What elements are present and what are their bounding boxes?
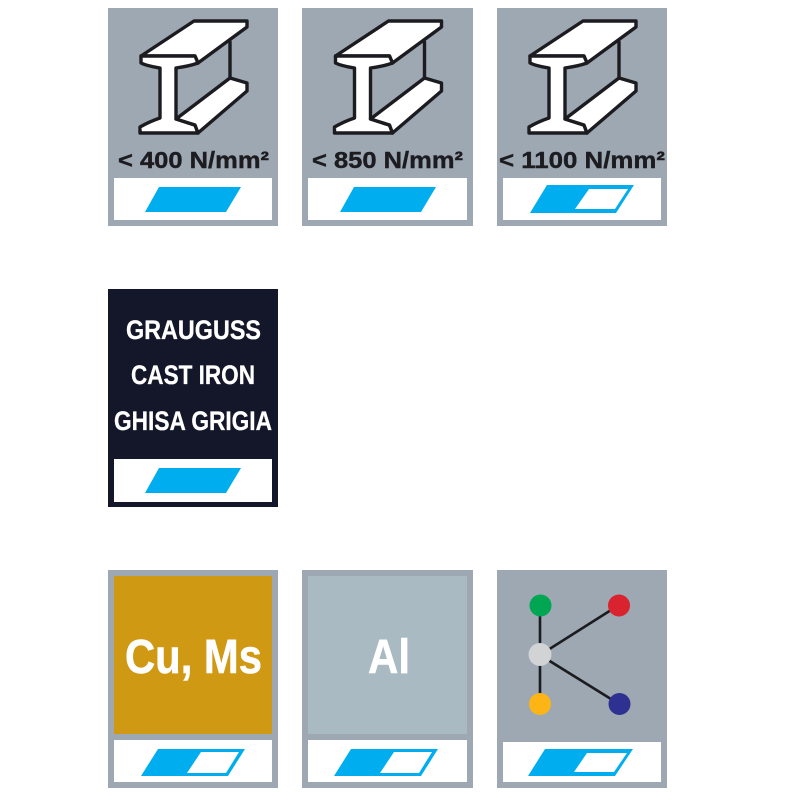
label: Cu, Ms: Cu, Ms [125, 631, 262, 684]
label: under 1100 N/mm2: < 1100 N/mm² [499, 147, 665, 173]
label: Al: Al [368, 631, 410, 684]
rating bar: half [308, 740, 467, 782]
label: under 850 N/mm2: < 850 N/mm² [312, 147, 463, 173]
rating bar: full [114, 459, 272, 502]
icon: steel I-beam [140, 21, 247, 133]
rating bar: half [114, 740, 272, 782]
icon: steel I-beam [529, 21, 636, 133]
label: Cast Iron: CAST IRON [131, 360, 255, 390]
label: Grauguss: GRAUGUSS [126, 315, 261, 345]
rating bar: full [308, 178, 467, 220]
rating bar: half [503, 178, 661, 220]
panel: steel under 850 N/mm2 [302, 8, 473, 226]
panel: steel under 1100 N/mm2 [497, 8, 667, 226]
icon: steel I-beam [334, 21, 442, 133]
panel: aluminium [302, 570, 473, 788]
rating bar: half [503, 742, 661, 782]
rating bar: full [114, 178, 272, 220]
icon: molecule diagram [528, 594, 630, 715]
label: Ghisa Grigia: GHISA GRIGIA [114, 406, 272, 436]
label: under 400 N/mm2: < 400 N/mm² [118, 147, 269, 173]
panel: copper and brass [108, 570, 278, 788]
panel: steel under 400 N/mm2 [108, 8, 278, 226]
swatch: copper colour [114, 576, 272, 734]
panel: plastics [497, 570, 667, 788]
swatch: aluminium colour [308, 576, 467, 734]
panel: cast iron [108, 289, 278, 507]
